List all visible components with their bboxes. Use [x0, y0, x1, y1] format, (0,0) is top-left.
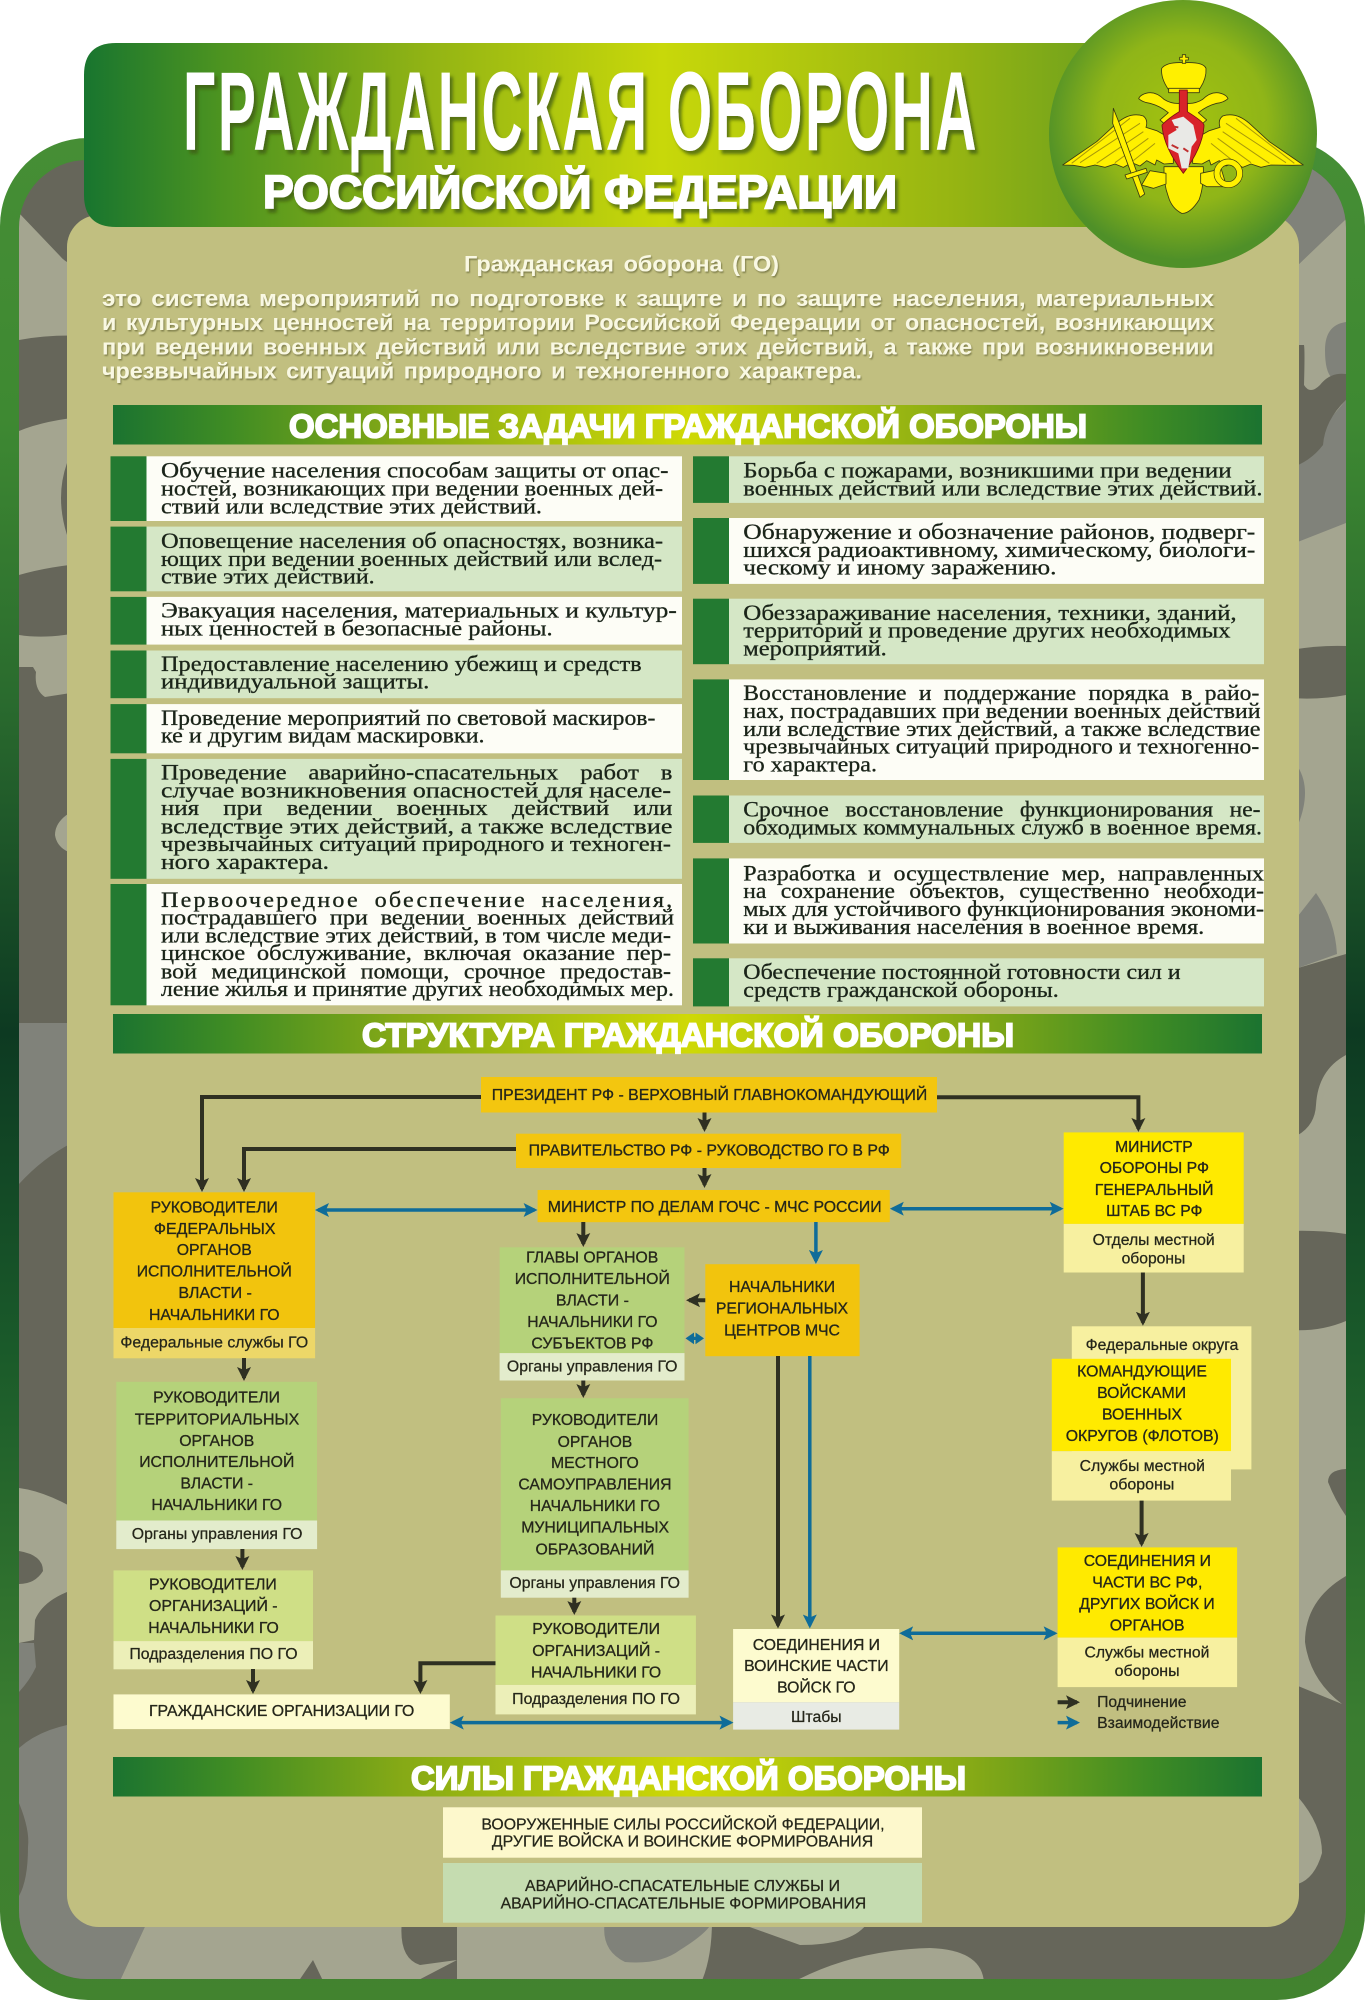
task 1: ствий или вследствие этих действий. — [161, 493, 542, 518]
box: regional executive heads: ИСПОЛНИТЕЛЬНОЙ — [515, 1269, 670, 1288]
box: defence minister: ОБОРОНЫ РФ — [1100, 1160, 1209, 1177]
task 11: Восстановление и поддержание порядка в райо- — [743, 680, 1259, 705]
box: armed forces units: Службы местной — [1084, 1645, 1209, 1662]
box: federal executive heads: ФЕДЕРАЛЬНЫХ — [154, 1221, 276, 1238]
box: local government heads: МУНИЦИПАЛЬНЫХ — [521, 1520, 669, 1537]
box: regional centres heads — [705, 1264, 860, 1356]
intro paragraph: и культурных ценностей на территории Российской Федерации от опасностей, возникающих — [102, 310, 1214, 335]
task 4: индивидуальной защиты. — [161, 669, 429, 694]
box: armed forces units: ЧАСТИ ВС РФ, — [1092, 1575, 1202, 1592]
task 12: обходимых коммунальных служб в военное время. — [743, 814, 1262, 839]
task 11: или вследствие этих действий, а также вследствие — [743, 716, 1260, 741]
box: local government heads: РУКОВОДИТЕЛИ — [532, 1412, 658, 1429]
box: armed forces units: ОРГАНОВ — [1110, 1618, 1184, 1635]
task 6: случае возникновения опасностей для населе- — [161, 777, 671, 802]
task 11: го характера. — [743, 752, 877, 776]
arrow: local to organisations — [572, 1598, 576, 1612]
box: federal executive heads: ОРГАНОВ — [177, 1242, 252, 1259]
box: civil defence troops: Штабы — [791, 1709, 842, 1726]
task 12: Срочное восстановление функционирования не- — [743, 796, 1260, 821]
subtitle: РОССИЙСКОЙ ФЕДЕРАЦИИ — [263, 166, 897, 218]
task 14: средств гражданской обороны. — [743, 977, 1059, 1002]
box: civil defence troops — [733, 1629, 899, 1730]
box: civil defence troops: СОЕДИНЕНИЯ И — [753, 1637, 880, 1654]
box: president — [481, 1077, 937, 1112]
box: defence minister — [1064, 1132, 1244, 1272]
box: rescue services: АВАРИЙНО-СПАСАТЕЛЬНЫЕ СЛУЖБЫ И — [525, 1877, 840, 1895]
box: territorial executive heads: ТЕРРИТОРИАЛЬНЫХ — [135, 1411, 300, 1428]
task 8 — [693, 456, 1264, 503]
box: regional centres heads: НАЧАЛЬНИКИ — [729, 1279, 835, 1296]
task 6: Проведение аварийно-спасательных работ в — [161, 760, 672, 785]
box: armed forces units: ДРУГИХ ВОЙСК И — [1079, 1594, 1215, 1613]
box: rescue services: АВАРИЙНО-СПАСАТЕЛЬНЫЕ ФОРМИРОВАНИЯ — [501, 1894, 866, 1912]
box: federal districts backing — [1072, 1326, 1251, 1469]
intro paragraph: при ведении военных действий или вследствие этих действий, а также при возникновении — [102, 334, 1214, 359]
box: military district commanders — [1052, 1359, 1231, 1501]
task 4 — [110, 650, 682, 698]
task 13: на сохранение объектов, существенно необходи- — [743, 878, 1264, 903]
box: organisation heads middle: Подразделения ПО ГО — [512, 1691, 680, 1708]
box: armed forces units: СОЕДИНЕНИЯ И — [1084, 1553, 1211, 1570]
box: local government heads: ОБРАЗОВАНИЙ — [536, 1539, 654, 1558]
arrow: defence minister to districts — [1141, 1272, 1145, 1323]
arrow: regional executive to local — [581, 1380, 585, 1395]
task 13: Разработка и осуществление мер, направленных — [743, 860, 1264, 885]
box: military district commanders: ОКРУГОВ (ФЛОТОВ) — [1066, 1428, 1219, 1445]
box: territorial executive heads: НАЧАЛЬНИКИ ГО — [151, 1497, 282, 1514]
arrow: government to minister — [702, 1168, 706, 1185]
section heading: structure: СТРУКТУРА ГРАЖДАНСКОЙ ОБОРОНЫ — [362, 1016, 1014, 1054]
section heading: main tasks — [113, 405, 1262, 444]
arrow: president to federal heads — [202, 1097, 481, 1189]
intro paragraph: чрезвычайных ситуаций природного и техногенного характера. — [102, 358, 862, 383]
panel: tasks right column — [693, 456, 1264, 1006]
header banner — [84, 43, 1240, 227]
arrow: minister to regional centres — [814, 1222, 818, 1261]
task 2: ющих при ведении военных действий или вслед- — [161, 546, 662, 571]
box: organisation heads left: ОРГАНИЗАЦИЙ - — [149, 1596, 278, 1615]
box: local government heads: Органы управления ГО — [509, 1575, 680, 1592]
box: territorial executive heads: РУКОВОДИТЕЛИ — [153, 1390, 280, 1407]
box: armed forces: ВООРУЖЕННЫЕ СИЛЫ РОССИЙСКОЙ ФЕДЕРАЦИИ, — [481, 1815, 884, 1833]
box: organisation heads middle: ОРГАНИЗАЦИЙ - — [532, 1641, 660, 1660]
arrow: government to federal heads — [244, 1149, 516, 1189]
box: defence minister: Отделы местной — [1093, 1232, 1215, 1249]
icon: double-headed eagle emblem — [1063, 55, 1303, 213]
main khaki panel — [67, 215, 1299, 1927]
task 1: ностей, возникающих при ведении военных дей- — [161, 476, 663, 500]
task 13 — [693, 858, 1264, 944]
box: president: ПРЕЗИДЕНТ РФ - ВЕРХОВНЫЙ ГЛАВНОКОМАНДУЮЩИЙ — [492, 1085, 927, 1104]
arrow: federal heads and minister interaction — [318, 1208, 535, 1212]
box: organisation heads middle: РУКОВОДИТЕЛИ — [532, 1621, 660, 1638]
box: regional executive heads — [500, 1247, 684, 1380]
arrow: regional centres to regional executive — [689, 1298, 705, 1302]
task 3: ных ценностей в безопасные районы. — [161, 615, 553, 640]
task 1: Обучение населения способам защиты от опас- — [161, 458, 668, 483]
box: government — [516, 1134, 901, 1168]
box: organisation heads left: РУКОВОДИТЕЛИ — [149, 1576, 277, 1594]
arrow: regional centres to troops interaction — [808, 1356, 812, 1626]
task 7: пострадавшего при ведении военных действий — [161, 905, 674, 930]
box: regional executive heads: НАЧАЛЬНИКИ ГО — [527, 1314, 658, 1331]
section heading: forces — [113, 1757, 1262, 1796]
box: regional executive heads: ВЛАСТИ - — [556, 1292, 629, 1309]
section heading: main tasks: ОСНОВНЫЕ ЗАДАЧИ ГРАЖДАНСКОЙ ОБОРОНЫ — [289, 406, 1087, 444]
emblem circle — [1049, 0, 1317, 268]
task 2: Оповещение населения об опасностях, возника- — [161, 528, 663, 553]
box: organisation heads left: Подразделения ПО ГО — [129, 1646, 298, 1663]
intro definition text — [102, 252, 1215, 383]
box: local government heads — [501, 1398, 689, 1598]
box: local government heads: НАЧАЛЬНИКИ ГО — [530, 1498, 660, 1515]
arrow: civil organisations and troops interaction — [453, 1721, 730, 1724]
box: military district commanders: Службы местной — [1080, 1458, 1205, 1475]
task 1 — [110, 456, 682, 521]
task 13: мых для устойчивого функционирования экономи- — [743, 896, 1264, 921]
box: emergency minister — [538, 1190, 890, 1222]
task 11: нах, пострадавших при ведении военных действий — [743, 698, 1261, 723]
box: territorial executive heads — [116, 1382, 317, 1549]
box: local government heads: ОРГАНОВ — [558, 1434, 632, 1451]
task 12 — [693, 796, 1264, 843]
box: territorial executive heads: ВЛАСТИ - — [180, 1475, 253, 1492]
arrow: regional centres and executive interaction — [686, 1332, 704, 1344]
task 9: Обнаружение и обозначение районов, подверг- — [743, 519, 1255, 544]
arrow: president to government — [702, 1112, 706, 1129]
task 14: Обеспечение постоянной готовности сил и — [743, 959, 1181, 984]
box: federal executive heads: ИСПОЛНИТЕЛЬНОЙ — [137, 1261, 292, 1280]
org chart — [114, 1077, 1251, 1732]
task 3 — [110, 597, 682, 645]
task 11: чрезвычайных ситуаций природного и техногенно- — [743, 734, 1259, 759]
task 7: Первоочередное обеспечение населения, — [161, 887, 674, 912]
task 5: Проведение мероприятий по световой маскиров- — [161, 705, 655, 730]
task 6: чрезвычайных ситуаций природного и техноген- — [161, 831, 671, 856]
box: civil defence troops: ВОЙСК ГО — [777, 1678, 856, 1697]
box: federal executive heads: РУКОВОДИТЕЛИ — [151, 1200, 278, 1217]
task 7: вой медицинской помощи, срочное предостав- — [161, 958, 671, 983]
arrow: minister and defence interaction — [893, 1207, 1061, 1210]
box: defence minister: ШТАБ ВС РФ — [1106, 1203, 1202, 1220]
box: civil defence troops: ВОИНСКИЕ ЧАСТИ — [744, 1658, 889, 1675]
task 7 — [110, 884, 682, 1005]
box: organisation heads middle — [496, 1616, 696, 1714]
box: defence minister: МИНИСТР — [1115, 1139, 1193, 1156]
box: federal executive heads: ВЛАСТИ - — [178, 1285, 252, 1302]
task 2: ствие этих действий. — [161, 564, 375, 588]
task 6: ния при ведении военных действий или — [161, 795, 673, 820]
box: armed forces: ДРУГИЕ ВОЙСКА И ВОИНСКИЕ ФОРМИРОВАНИЯ — [492, 1833, 873, 1851]
box: armed forces units: обороны — [1115, 1663, 1180, 1680]
task 5 — [110, 704, 682, 753]
task 10: территорий и проведение других необходимых — [743, 618, 1230, 643]
box: regional centres heads: ЦЕНТРОВ МЧС — [724, 1322, 840, 1339]
task 14 — [693, 958, 1264, 1006]
box: civil organisations: ГРАЖДАНСКИЕ ОРГАНИЗАЦИИ ГО — [149, 1703, 414, 1720]
box: local government heads: САМОУПРАВЛЕНИЯ — [518, 1477, 672, 1494]
arrow: troops and armed forces interaction — [902, 1632, 1055, 1635]
task 2 — [110, 527, 682, 591]
task 7: ление жилья и принятие других необходимых мер. — [161, 976, 674, 1001]
box: territorial executive heads: ИСПОЛНИТЕЛЬНОЙ — [139, 1452, 294, 1471]
box: military district commanders: обороны — [1109, 1476, 1174, 1493]
box: defence minister: обороны — [1122, 1250, 1185, 1267]
task 6: вследствие этих действий, а также вследствие — [161, 813, 672, 838]
box: armed forces units — [1058, 1547, 1237, 1687]
box: military district commanders: ВОЕННЫХ — [1102, 1406, 1182, 1424]
box: regional executive heads: СУБЪЕКТОВ РФ — [531, 1335, 653, 1352]
legend — [1058, 1694, 1220, 1732]
box: federal districts backing: Федеральные округа — [1086, 1337, 1239, 1354]
task 10 — [693, 599, 1264, 664]
arrow: commanders to units — [1140, 1501, 1144, 1544]
task 11 — [693, 679, 1264, 780]
task 7: цинское обслуживание, включая оказание пер- — [161, 940, 671, 965]
task 9: ческому и иному заражению. — [743, 555, 1056, 580]
task 7: или вследствие этих действий, в том числе меди- — [161, 922, 671, 947]
task 3: Эвакуация населения, материальных и культур- — [161, 598, 677, 623]
box: federal executive heads — [114, 1192, 315, 1358]
arrow: organisations to civil organisations — [251, 1669, 255, 1691]
task 9 — [693, 518, 1264, 584]
box: armed forces — [443, 1807, 922, 1858]
box: defence minister: ГЕНЕРАЛЬНЫЙ — [1095, 1180, 1214, 1199]
intro paragraph — [102, 286, 1215, 383]
box: military district commanders: ВОЙСКАМИ — [1097, 1383, 1186, 1402]
box: government: ПРАВИТЕЛЬСТВО РФ - РУКОВОДСТВО ГО В РФ — [529, 1142, 890, 1159]
legend: Подчинение — [1097, 1694, 1186, 1711]
box: military district commanders: КОМАНДУЮЩИЕ — [1077, 1364, 1207, 1381]
box: territorial executive heads: Органы управления ГО — [132, 1526, 302, 1543]
task 6 — [110, 759, 682, 879]
box: regional executive heads: ГЛАВЫ ОРГАНОВ — [526, 1250, 658, 1266]
task 8: Борьба с пожарами, возникшими при ведении — [743, 458, 1232, 483]
task 9: шихся радиоактивному, химическому, биологи- — [743, 537, 1255, 562]
box: regional centres heads: РЕГИОНАЛЬНЫХ — [716, 1301, 848, 1318]
arrow: middle organisations to civil organisations — [420, 1663, 496, 1691]
box: regional executive heads: Органы управления ГО — [507, 1358, 678, 1375]
legend: Взаимодействие — [1097, 1715, 1220, 1732]
box: territorial executive heads: ОРГАНОВ — [179, 1433, 254, 1450]
task 13: ки и выживания населения в военное время. — [743, 914, 1204, 939]
intro paragraph: это система мероприятий по подготовке к защите и по защите населения, материальных — [102, 286, 1215, 311]
intro heading: Гражданская оборона (ГО) — [464, 252, 779, 276]
section heading: structure — [113, 1014, 1262, 1054]
box: local government heads: МЕСТНОГО — [551, 1455, 639, 1472]
arrow: president to defence minister — [937, 1097, 1138, 1129]
box: federal executive heads: Федеральные службы ГО — [120, 1334, 308, 1352]
task 5: ке и другим видам маскировки. — [161, 723, 485, 748]
task 10: мероприятий. — [743, 636, 887, 661]
box: organisation heads left: НАЧАЛЬНИКИ ГО — [148, 1620, 279, 1637]
box: organisation heads middle: НАЧАЛЬНИКИ ГО — [531, 1664, 661, 1682]
panel: tasks left column — [110, 456, 682, 1005]
box: civil organisations — [114, 1694, 450, 1729]
task 4: Предоставление населению убежищ и средств — [161, 651, 642, 676]
task 8: военных действий или вследствие этих действий. — [743, 476, 1262, 500]
task 10: Обеззараживание населения, техники, зданий, — [743, 600, 1237, 625]
arrow: territorial to organisations — [240, 1549, 244, 1567]
box: rescue services — [443, 1863, 922, 1923]
task 6: ного характера. — [161, 849, 329, 874]
arrow: regional centres to troops subordination — [776, 1356, 780, 1626]
arrow: federal to territorial — [242, 1358, 246, 1378]
box: emergency minister: МИНИСТР ПО ДЕЛАМ ГОЧС - МЧС РОССИИ — [548, 1199, 882, 1216]
box: organisation heads left — [114, 1570, 313, 1669]
section heading: forces: СИЛЫ ГРАЖДАНСКОЙ ОБОРОНЫ — [411, 1758, 966, 1796]
box: federal executive heads: НАЧАЛЬНИКИ ГО — [149, 1307, 280, 1324]
arrow: minister to regional executive — [581, 1222, 585, 1244]
